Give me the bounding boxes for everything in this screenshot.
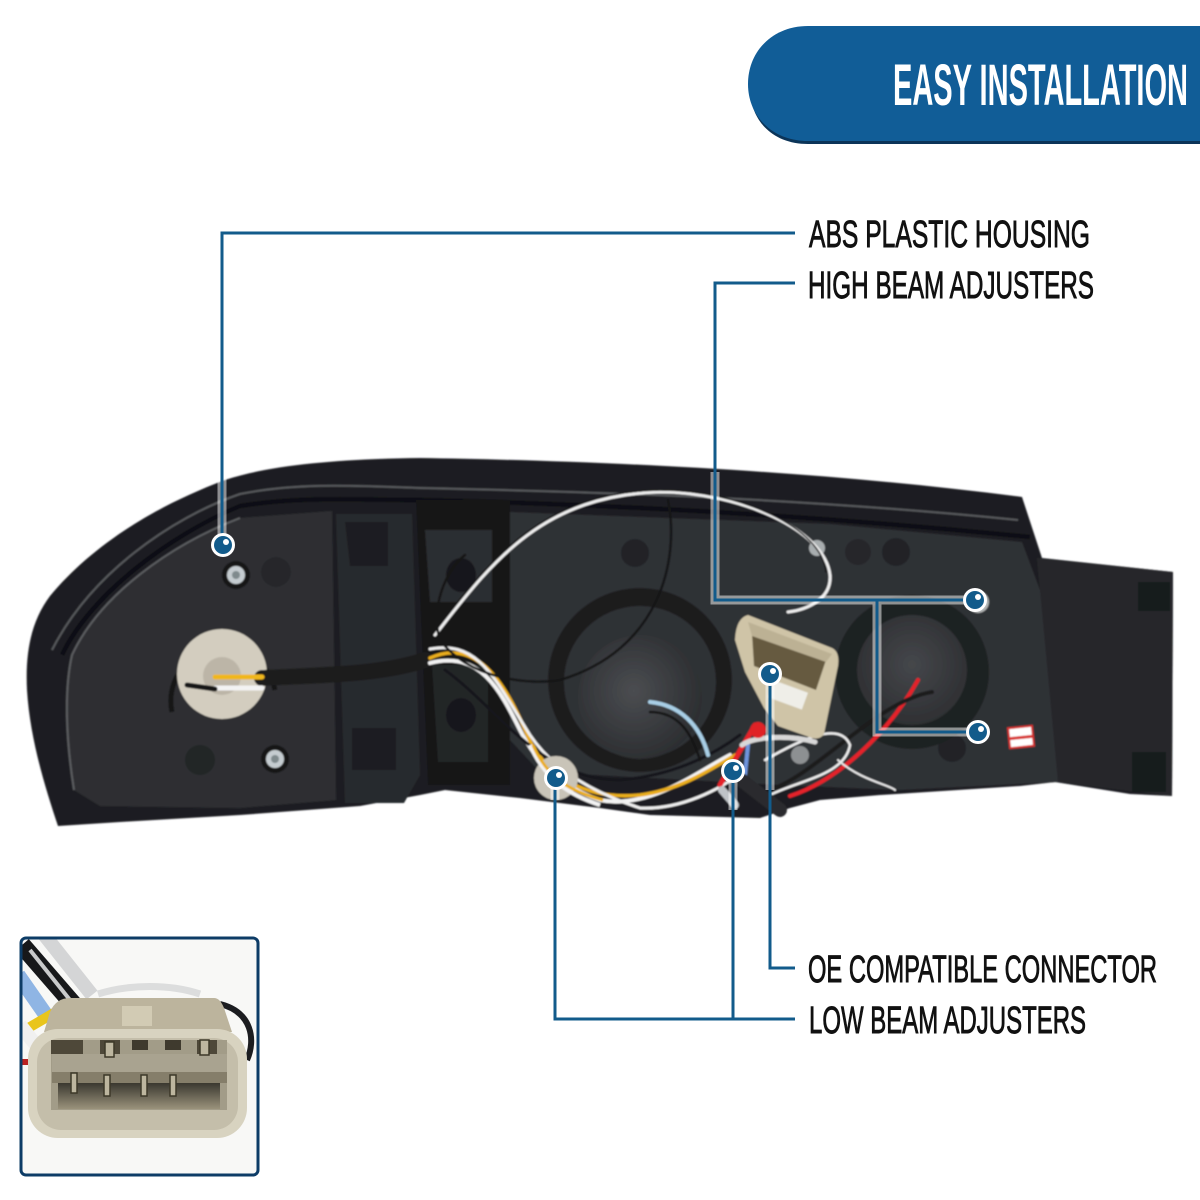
bulb socket	[171, 648, 275, 712]
callout dots	[211, 533, 990, 790]
grommet	[534, 756, 578, 800]
housing end flap	[1037, 558, 1173, 796]
heading banner: easy installation	[748, 26, 1200, 144]
callout line: high beam adjusters	[715, 283, 978, 732]
callout line: oe compatible connector	[770, 675, 795, 968]
callout line halos	[222, 470, 978, 810]
callout line: low beam adjusters	[555, 772, 795, 1019]
inset wires	[18, 932, 251, 1062]
screws and plugs	[222, 561, 250, 589]
inset frame	[21, 938, 258, 1175]
inset connector pins	[71, 1040, 209, 1096]
inset: connector close-up	[18, 932, 258, 1175]
housing rear panel	[67, 511, 336, 808]
wiring harness	[187, 490, 932, 810]
housing top rim highlight	[52, 486, 1018, 650]
rubber caps	[548, 588, 732, 772]
housing outer shell	[27, 458, 1173, 826]
beige connector	[735, 615, 838, 738]
product: headlight rear housing	[27, 458, 1173, 826]
label sticker	[1007, 725, 1035, 749]
callout lines	[222, 233, 978, 1019]
callout line: abs plastic housing	[222, 233, 795, 545]
inset connector body	[44, 998, 232, 1032]
